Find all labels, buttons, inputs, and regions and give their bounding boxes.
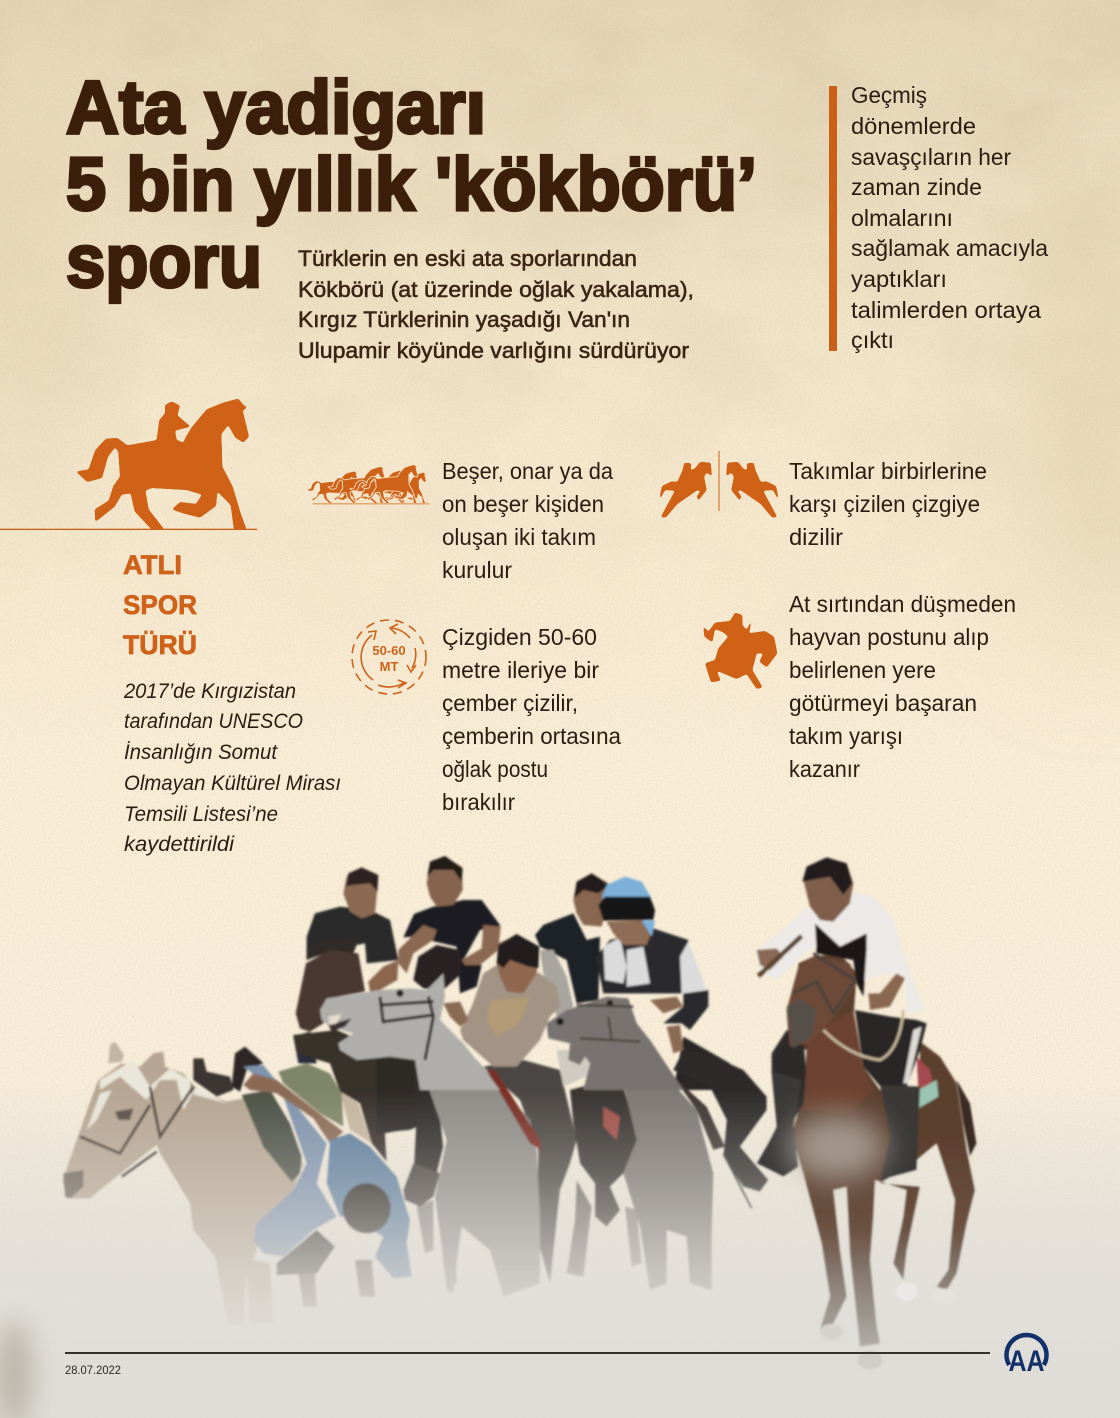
title <box>66 65 757 303</box>
icon: running horses <box>307 464 429 504</box>
text: the circle <box>442 624 621 815</box>
subtitle text: Ulupamir köyünde varlığını sürdürüyor <box>298 338 689 363</box>
palomino horse with falling rider <box>63 1042 412 1327</box>
icon: 50-60 metre circle: MT <box>380 659 398 674</box>
dust fog <box>0 1090 1120 1360</box>
icon: 50-60 metre circle <box>352 620 426 694</box>
lower dark horses and legs <box>377 1050 642 1283</box>
side note text: Geçmiş <box>851 82 927 108</box>
heading: atlı spor türü: TÜRÜ <box>123 630 197 660</box>
heading: atlı spor türü <box>123 550 197 660</box>
UNESCO note: Temsili Listesi’ne <box>124 803 278 826</box>
side note text: sağlamak amacıyla <box>851 235 1048 261</box>
icon: bucking horse <box>703 613 777 689</box>
subtitle text <box>298 246 694 363</box>
text: team formation: Beşer, onar ya da <box>442 458 613 484</box>
background riders and dark horses <box>293 856 609 1063</box>
grey horse heads <box>320 973 683 1090</box>
text: winning: At sırtından düşmeden <box>789 591 1016 617</box>
date: 28.07.2022 <box>65 1363 121 1377</box>
text: the circle: Çizgiden 50-60 <box>442 624 597 650</box>
UNESCO note <box>123 680 341 856</box>
right rider and brown horse <box>755 857 977 1369</box>
title: sporu <box>66 219 262 303</box>
bottom-left smudge <box>0 1320 30 1418</box>
orange side bar <box>829 86 837 351</box>
Juventus shirt rider <box>596 877 730 1090</box>
side note text: talimlerden ortaya <box>851 297 1041 323</box>
text: lining up: Takımlar birbirlerine <box>789 458 987 484</box>
icon: facing riders <box>659 451 779 517</box>
UNESCO note: kaydettirildi <box>124 833 235 856</box>
logo: AA <box>1007 1335 1047 1378</box>
text: the circle: oğlak postu <box>442 756 548 782</box>
text: lining up: karşı çizilen çizgiye <box>789 491 980 517</box>
text: the circle: çemberin ortasına <box>442 723 621 749</box>
text: team formation <box>442 458 613 583</box>
text: winning <box>789 591 1016 782</box>
heading: atlı spor türü: SPOR <box>123 590 197 620</box>
text: winning: hayvan postunu alıp <box>789 624 989 650</box>
photo illustration: riders and horses in dust <box>0 856 1120 1418</box>
UNESCO note: 2017’de Kırgızistan <box>123 680 296 703</box>
UNESCO note: tarafından UNESCO <box>124 710 303 733</box>
grey horse bodies and rider leg <box>420 1050 768 1297</box>
heading: atlı spor türü: ATLI <box>123 550 182 580</box>
dark horse body behind palomino <box>293 1030 415 1162</box>
side note text: yaptıkları <box>851 266 947 292</box>
text: the circle: metre ileriye bir <box>442 657 599 683</box>
icon: horse and rider <box>0 399 257 530</box>
UNESCO note: Olmayan Kültürel Mirası <box>124 772 341 795</box>
camouflage jacket rider <box>443 934 560 1067</box>
text: winning: takım yarışı <box>789 723 903 749</box>
text: team formation: kurulur <box>442 557 512 583</box>
text: winning: belirlenen yere <box>789 657 936 683</box>
UNESCO note: İnsanlığın Somut <box>124 741 278 764</box>
text: winning: götürmeyi başaran <box>789 690 977 716</box>
subtitle text: Türklerin en eski ata sporlarından <box>298 246 637 271</box>
text: team formation: on beşer kişiden <box>442 491 604 517</box>
text: the circle: bırakılır <box>442 789 515 815</box>
text: lining up: dizilir <box>789 524 843 550</box>
text: winning: kazanır <box>789 756 860 782</box>
logo: AA: AA <box>1008 1345 1044 1378</box>
text: the circle: çember çizilir, <box>442 690 578 716</box>
side note text: çıktı <box>851 327 894 353</box>
icon: 50-60 metre circle: 50-60 <box>372 643 406 658</box>
text: team formation: oluşan iki takım <box>442 524 596 550</box>
footer rule <box>65 1352 990 1354</box>
title: Ata yadigarı <box>66 65 486 149</box>
subtitle text: Kökbörü (at üzerinde oğlak yakalama), <box>298 277 694 302</box>
title: 5 bin yıllık 'kökbörü’ <box>66 142 757 226</box>
side note text: dönemlerde <box>851 113 976 139</box>
side note text: savaşçıların her <box>851 144 1011 170</box>
side note text <box>851 82 1048 353</box>
side note text: zaman zinde <box>851 174 982 200</box>
subtitle text: Kırgız Türklerinin yaşadığı Van'ın <box>298 307 630 332</box>
side note text: olmalarını <box>851 205 953 231</box>
text: lining up <box>789 458 987 550</box>
